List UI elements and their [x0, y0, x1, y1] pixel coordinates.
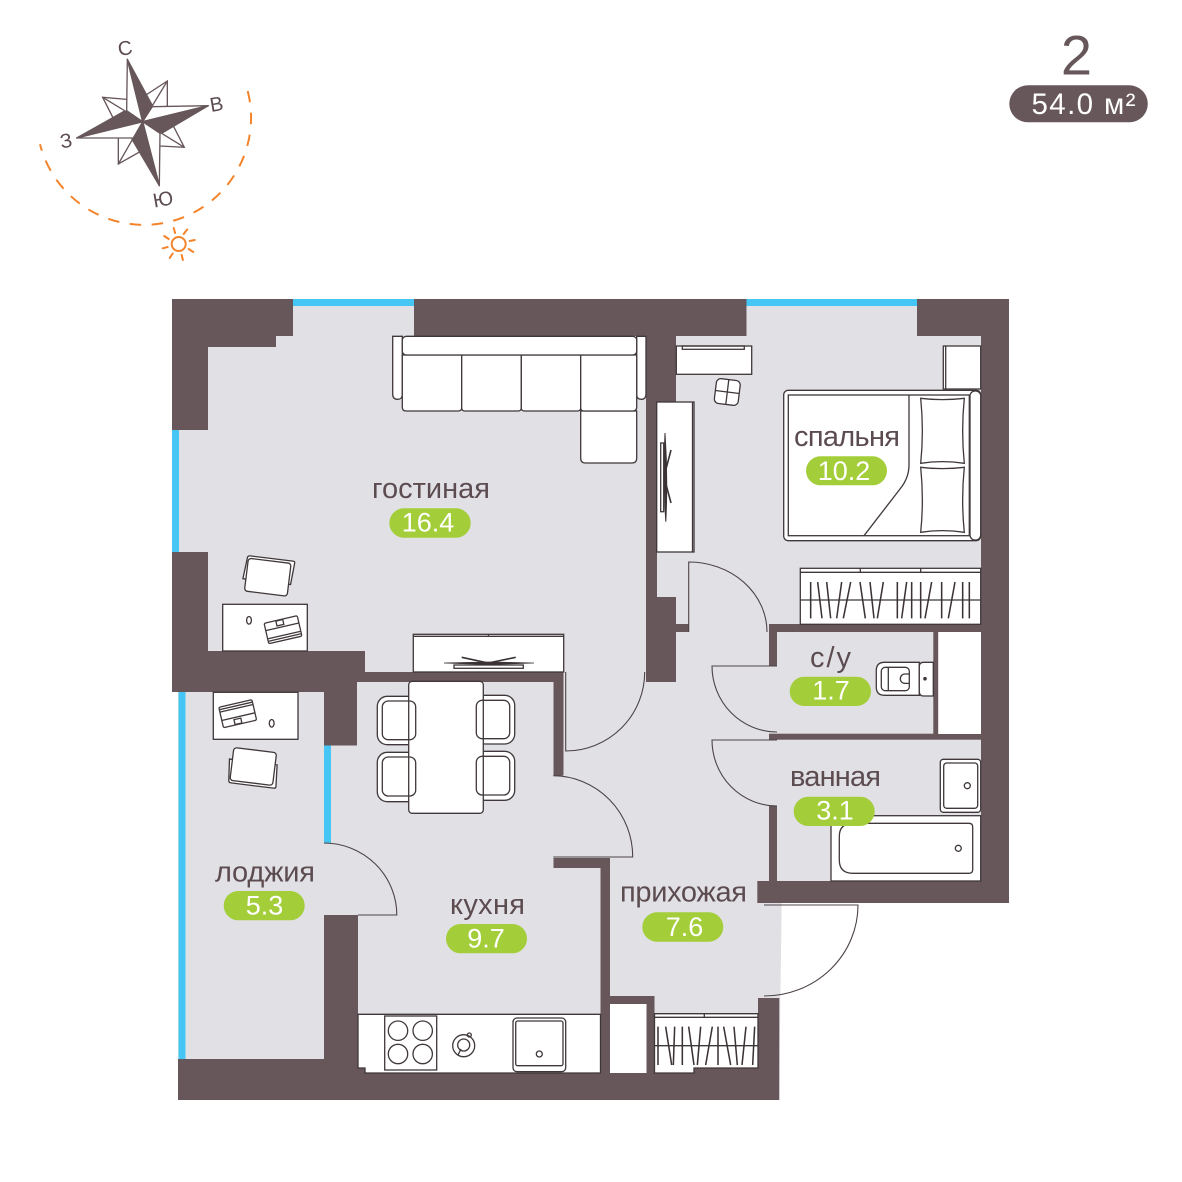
bedroom wardrobe — [800, 568, 981, 624]
room: кухня: 9.7 — [467, 924, 505, 954]
compass main points — [77, 59, 208, 186]
room: лоджия — [215, 856, 315, 921]
total area badge — [1009, 85, 1148, 122]
rooms count: 2 — [1061, 24, 1092, 86]
room: прихожая: прихожая — [620, 876, 747, 908]
shaft — [938, 632, 981, 734]
room: прихожая — [620, 876, 747, 942]
room: ванная: 3.1 — [816, 795, 854, 825]
loggia chair — [227, 747, 280, 788]
room: прихожая: 7.6 — [666, 912, 703, 942]
room: с/у: с/у — [810, 642, 852, 674]
doors — [324, 562, 858, 996]
compass letters: З — [58, 130, 74, 153]
room: с/у: 1.7 — [812, 676, 850, 706]
walls — [172, 299, 1009, 1100]
bathtub — [831, 816, 981, 881]
compass letters — [58, 37, 225, 213]
cooktop — [385, 1016, 437, 1070]
compass rose — [77, 59, 208, 186]
compass letters: В — [208, 93, 225, 117]
loggia desk — [213, 692, 298, 739]
faucet — [453, 1033, 475, 1057]
room: спальня — [794, 421, 900, 486]
laptop — [264, 616, 302, 644]
sofa — [393, 336, 646, 463]
sun path arc — [40, 91, 251, 225]
bathroom sink — [940, 759, 981, 812]
room: ванная: ванная — [790, 761, 881, 793]
windows — [172, 299, 917, 1059]
dining table with chairs — [377, 681, 515, 813]
compass letters: С — [116, 37, 134, 61]
room: гостиная: 16.4 — [402, 508, 454, 538]
room: лоджия: лоджия — [215, 856, 315, 888]
room: ванная — [790, 761, 881, 826]
bedroom TV stand — [657, 402, 694, 552]
compass letters: Ю — [151, 187, 175, 213]
room: спальня: 10.2 — [818, 456, 870, 486]
cup — [247, 616, 251, 624]
room: с/у — [790, 642, 871, 706]
living room TV stand — [413, 634, 564, 672]
icon: sun — [163, 228, 195, 260]
kitchen counter — [358, 1014, 600, 1073]
cup — [269, 720, 274, 727]
kitchen cabinet niche — [610, 1004, 646, 1073]
room: кухня — [446, 889, 527, 954]
living room chair — [241, 555, 295, 597]
room: кухня: кухня — [450, 889, 525, 921]
compass secondary points — [103, 81, 184, 164]
room: лоджия: 5.3 — [246, 891, 283, 921]
total area badge: 54.0 м² — [1032, 88, 1136, 121]
toilet — [876, 662, 933, 696]
bedroom stool — [714, 378, 741, 406]
bed — [784, 390, 981, 541]
hallway wardrobe — [654, 1014, 758, 1073]
room: гостиная — [372, 473, 490, 538]
bedroom desk — [676, 346, 752, 374]
nightstand — [943, 346, 981, 389]
sink — [513, 1018, 566, 1072]
living room desk — [223, 604, 307, 651]
floor — [172, 299, 1009, 1100]
laptop — [219, 700, 257, 728]
room: спальня: спальня — [794, 421, 900, 453]
room: гостиная: гостиная — [372, 473, 490, 505]
